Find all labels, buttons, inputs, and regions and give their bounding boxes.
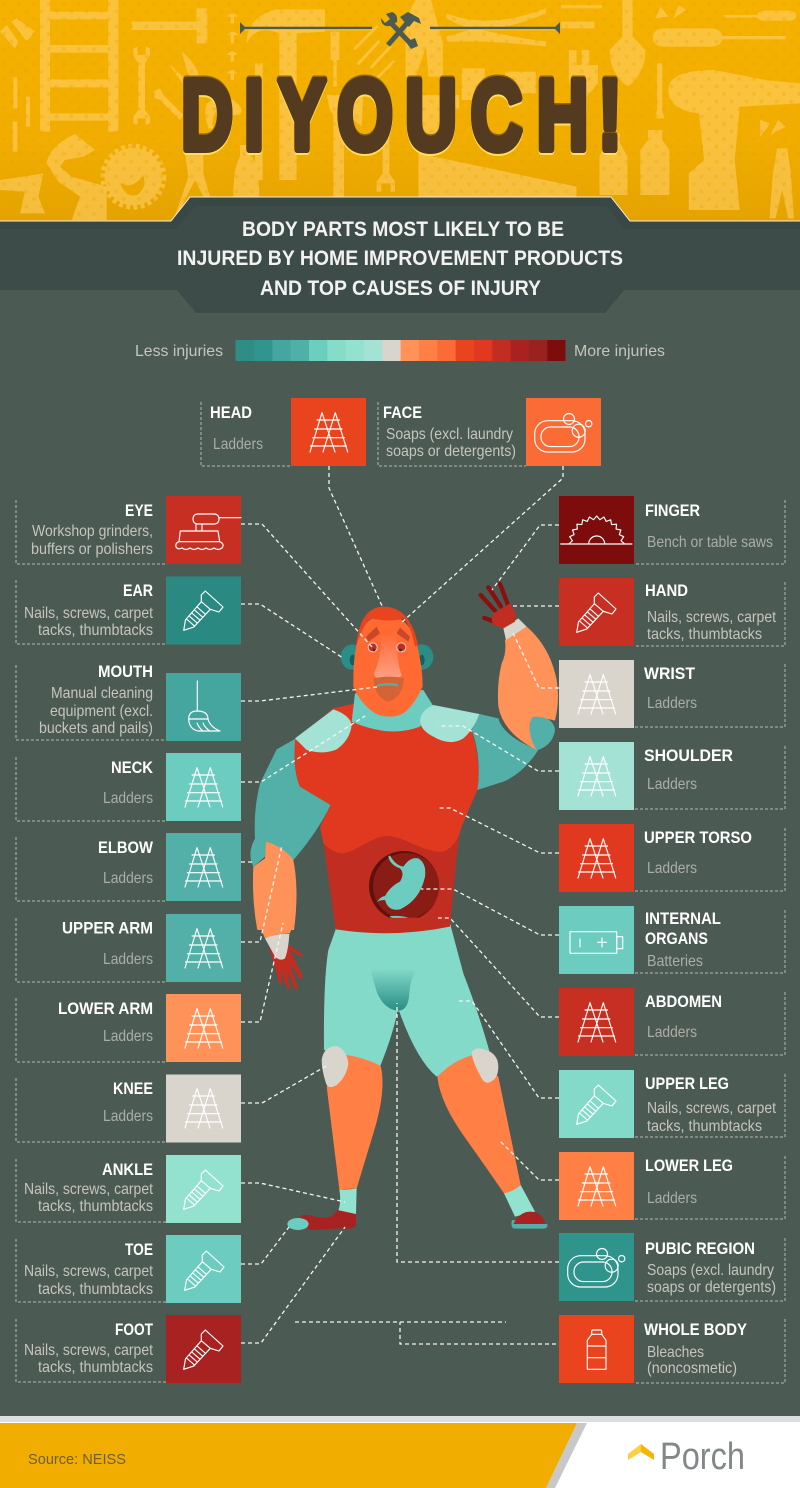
- heading: BODY PARTS MOST LIKELY TO BE: [242, 217, 564, 241]
- panel: foot: tacks, thumbtacks: [38, 1359, 153, 1376]
- title: DIYOUCH!: [181, 58, 622, 170]
- head: [353, 613, 423, 717]
- panel: mouth: MOUTH: [98, 662, 153, 681]
- heading: AND TOP CAUSES OF INJURY: [260, 276, 541, 300]
- subtitle band: [0, 197, 800, 313]
- title: DIYOUCH!: [181, 62, 622, 173]
- panel: mouth: [16, 662, 241, 741]
- panel: lower leg: LOWER LEG: [645, 1156, 733, 1175]
- feet and toes: [300, 1210, 356, 1230]
- panel: whole body: [559, 1315, 785, 1383]
- icon: ladder: [559, 1152, 634, 1220]
- panel: face: FACE: [383, 403, 422, 422]
- panel: finger: [559, 496, 785, 564]
- panel: toe: TOE: [125, 1240, 153, 1259]
- internal organs: [369, 851, 439, 921]
- panel: knee: [16, 1074, 241, 1142]
- icon: ladder: [559, 660, 634, 728]
- panel: wrist: WRIST: [644, 664, 696, 683]
- panel: hand: tacks, thumbtacks: [647, 626, 762, 643]
- panel: upper leg: [559, 1070, 785, 1138]
- panel: wrist: Ladders: [647, 695, 697, 712]
- panel: knee: Ladders: [103, 1108, 153, 1125]
- icon: screw: [166, 1315, 241, 1383]
- icon: screw: [559, 578, 634, 646]
- panel: eye: EYE: [125, 501, 153, 520]
- icon: broom: [166, 673, 241, 741]
- upper legs: [324, 923, 490, 1077]
- icon: ladder: [166, 753, 241, 821]
- tool silhouettes, left half: [0, 0, 395, 220]
- legend: injury colour scale: More injuries: [574, 343, 665, 360]
- icon: screw: [166, 576, 241, 644]
- left arm: [250, 738, 331, 867]
- panel: lower arm: Ladders: [103, 1028, 153, 1045]
- icon: ladder: [166, 833, 241, 901]
- heading: INJURED BY HOME IMPROVEMENT PRODUCTS: [177, 246, 623, 270]
- icon: screw: [559, 1070, 634, 1138]
- eyes and brows: [366, 627, 410, 642]
- panel: ankle: Nails, screws, carpet: [24, 1181, 153, 1198]
- panel: mouth: Manual cleaning: [51, 685, 153, 702]
- panel: head: Ladders: [213, 436, 263, 453]
- icon: screw: [166, 1155, 241, 1223]
- legend: injury colour scale: [135, 340, 665, 361]
- panel: eye: Workshop grinders,: [32, 523, 153, 540]
- panel: neck: NECK: [111, 758, 154, 777]
- panel: upper arm: Ladders: [103, 951, 153, 968]
- panel: toe: Nails, screws, carpet: [24, 1263, 153, 1280]
- panel: ear: tacks, thumbtacks: [38, 622, 153, 639]
- icon: soap: [526, 398, 601, 466]
- connector lines: [241, 466, 563, 1344]
- upper body: [250, 584, 558, 933]
- panel: whole body: Bleaches: [647, 1344, 704, 1361]
- icon: crossed hammer and wrench with rules: [240, 12, 560, 49]
- panel: internal organs: [559, 906, 785, 974]
- knees: [322, 1046, 348, 1087]
- lower body: [257, 917, 548, 1230]
- icon: soap: [559, 1233, 634, 1301]
- upper torso: [295, 703, 479, 853]
- panel: abdomen: Ladders: [647, 1024, 697, 1041]
- panel: upper torso: [559, 824, 785, 892]
- raised right arm: [472, 714, 538, 790]
- panel: hand: HAND: [645, 581, 688, 600]
- panel: face: soaps or detergents): [386, 443, 516, 460]
- abdomen: [322, 830, 460, 933]
- legend: injury colour scale: Less injuries: [135, 343, 223, 360]
- panel: pubic region: Soaps (excl. laundry: [647, 1262, 774, 1279]
- panel: toe: tacks, thumbtacks: [38, 1281, 153, 1298]
- panel: head: HEAD: [210, 403, 252, 422]
- icon: ladder: [291, 398, 366, 466]
- icon: saw: [559, 496, 634, 564]
- title: DIYOUCH!: [181, 60, 622, 171]
- panel: ankle: ANKLE: [102, 1160, 153, 1179]
- panel: upper arm: UPPER ARM: [62, 918, 153, 938]
- left hand: [257, 920, 303, 989]
- panel: upper arm: [16, 914, 241, 982]
- panel: elbow: ELBOW: [98, 838, 154, 857]
- panel: ankle: [16, 1155, 241, 1223]
- ankles: [337, 1188, 357, 1214]
- panel: lower arm: LOWER ARM: [58, 999, 153, 1018]
- panel: upper leg: Nails, screws, carpet: [647, 1100, 776, 1117]
- panel: whole body: (noncosmetic): [647, 1360, 737, 1377]
- panel: hand: Nails, screws, carpet: [647, 609, 776, 626]
- panel: finger: Bench or table saws: [647, 534, 773, 551]
- panel: pubic region: soaps or detergents): [647, 1279, 776, 1296]
- panel: mouth: equipment (excl.: [50, 703, 153, 720]
- footer: [0, 1416, 800, 1488]
- icon: ladder: [166, 994, 241, 1062]
- icon: ladder: [166, 914, 241, 982]
- icon: ladder: [559, 988, 634, 1056]
- neck: [352, 690, 433, 731]
- panel: lower leg: Ladders: [647, 1190, 697, 1207]
- panel: upper torso: Ladders: [647, 860, 697, 877]
- panel: finger: FINGER: [645, 501, 700, 520]
- figure: human body: [250, 584, 558, 1230]
- icon: bottle: [559, 1315, 634, 1383]
- panel: shoulder: Ladders: [647, 776, 697, 793]
- source: Source: NEISS: [28, 1451, 126, 1468]
- saw blade cut-out: [120, 175, 145, 196]
- logo: Porch: Porch: [660, 1436, 745, 1478]
- panel: neck: Ladders: [103, 790, 153, 807]
- panel: mouth: buckets and pails): [39, 720, 153, 737]
- panel: foot: FOOT: [115, 1320, 153, 1339]
- panel: internal organs: ORGANS: [645, 929, 708, 948]
- lower legs: [327, 1055, 383, 1189]
- panel: pubic region: PUBIC REGION: [645, 1239, 755, 1258]
- panel: shoulder: [559, 742, 785, 810]
- panel: hand: [559, 578, 785, 646]
- panel: ear: Nails, screws, carpet: [24, 605, 153, 622]
- panel: abdomen: [559, 988, 785, 1056]
- panel: face: [378, 398, 601, 466]
- panel: lower leg: [559, 1152, 785, 1220]
- panel: internal organs: Batteries: [647, 953, 703, 970]
- logo: Porch: [628, 1436, 745, 1478]
- tool silhouettes, right half: [406, 0, 800, 218]
- panel: elbow: [16, 833, 241, 901]
- panel: head: [201, 398, 366, 466]
- panel: whole body: WHOLE BODY: [644, 1320, 748, 1339]
- panel: foot: Nails, screws, carpet: [24, 1342, 153, 1359]
- icon: ladder: [559, 742, 634, 810]
- panel: toe: [16, 1235, 241, 1303]
- panel: foot: [16, 1315, 241, 1383]
- panel: wrist: [559, 660, 785, 728]
- icon: battery: [559, 906, 634, 974]
- panel: abdomen: ABDOMEN: [645, 992, 722, 1011]
- panel: upper leg: tacks, thumbtacks: [647, 1118, 762, 1135]
- shoulders: [295, 709, 352, 752]
- heading: [177, 217, 623, 300]
- panel: lower arm: [16, 994, 241, 1062]
- panel: ear: EAR: [123, 581, 153, 600]
- panel: internal organs: INTERNAL: [645, 909, 721, 928]
- icon: grinder: [166, 496, 241, 564]
- header banner: [0, 0, 800, 221]
- panel: pubic region: [559, 1233, 785, 1301]
- icon: ladder: [559, 824, 634, 892]
- panel: elbow: Ladders: [103, 870, 153, 887]
- panel: eye: [16, 496, 241, 564]
- panel: ankle: tacks, thumbtacks: [38, 1198, 153, 1215]
- panel: upper torso: UPPER TORSO: [644, 828, 752, 847]
- panel: face: Soaps (excl. laundry: [386, 426, 513, 443]
- panel: knee: KNEE: [113, 1079, 153, 1098]
- panel: shoulder: SHOULDER: [644, 746, 733, 765]
- ears: [341, 644, 364, 670]
- panel: neck: [16, 753, 241, 821]
- icon: screw: [166, 1235, 241, 1303]
- panel: ear: [16, 576, 241, 644]
- panel: eye: buffers or polishers: [31, 541, 153, 558]
- panel: upper leg: UPPER LEG: [645, 1074, 729, 1093]
- icon: ladder: [166, 1074, 241, 1142]
